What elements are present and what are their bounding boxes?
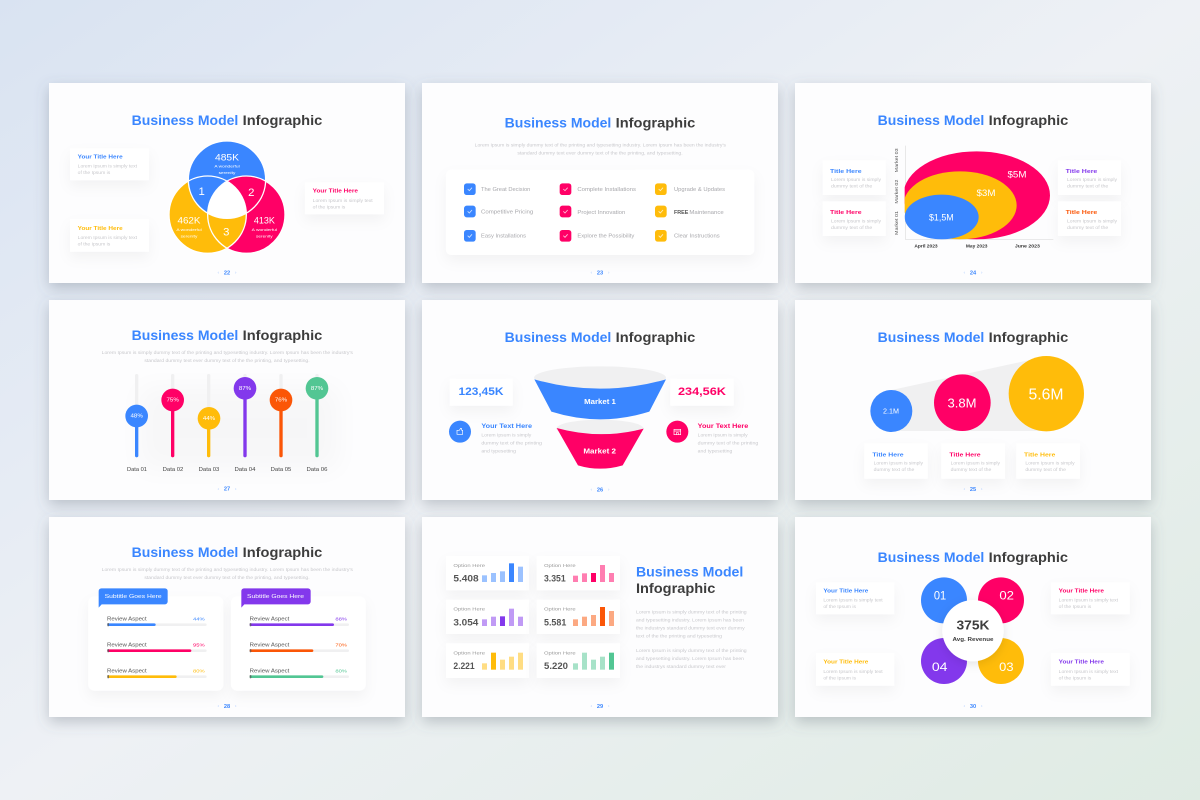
ellipse chart: Market 01	[894, 210, 899, 235]
venn diagram: serenity	[219, 170, 235, 175]
callout: pink	[305, 182, 384, 214]
intro text	[102, 567, 353, 580]
slider chart: 48%	[130, 414, 143, 420]
review card: left: Subtitle Goes Here	[105, 594, 162, 600]
callout: blue: of the Ipsum is	[78, 170, 110, 175]
venn diagram: 462K	[177, 215, 201, 225]
intro text: standard dummy text ever dummy text of the the printing, and typesetting.	[517, 150, 683, 155]
callout: purple: Title Here	[1066, 169, 1097, 175]
text block: text of the the printing and typesetting	[636, 633, 723, 638]
page number: ‹	[590, 704, 592, 710]
ellipse chart: May 2023	[966, 243, 988, 248]
page number: 27	[224, 487, 230, 493]
check labels: Project Innovation	[577, 210, 625, 216]
card: 3.351	[537, 556, 620, 590]
petal diagram	[921, 577, 1024, 684]
value card: right: 234,56K	[678, 386, 727, 398]
callout: purple: Lorem Ipsum is simply	[1067, 177, 1118, 182]
page number: ›	[608, 487, 610, 493]
review card: right: Review Aspect	[250, 669, 290, 675]
check labels: Clear Instructions	[674, 234, 720, 240]
card: 5.220: 5.220	[544, 661, 568, 671]
callout: blue: Lorem Ipsum is simply text	[823, 598, 884, 603]
venn diagram: 1	[199, 186, 205, 198]
review card: right: 80%	[335, 669, 348, 675]
page number: ‹	[590, 270, 592, 276]
review card: left: 95%	[193, 643, 205, 649]
panel: review bars slide 28	[49, 517, 405, 717]
page number: ›	[608, 270, 610, 276]
petal diagram: 375K	[956, 617, 990, 632]
slider chart: 87%	[311, 386, 323, 392]
panel: venn diagram slide 22	[49, 83, 405, 283]
review card: left: 80%	[193, 669, 205, 675]
heading: Infographic	[636, 580, 716, 596]
page number: ‹	[590, 487, 592, 493]
page number: ‹	[217, 486, 219, 492]
callout: orange: dummy text of the	[1067, 225, 1109, 230]
heading	[878, 112, 1069, 128]
panel: option cards slide 29	[422, 517, 778, 717]
panel: four petals slide 30	[795, 517, 1151, 717]
text block: left	[481, 424, 543, 453]
heading	[505, 329, 696, 345]
callout: yellow: Lorem Ipsum is simply text	[823, 669, 884, 674]
ellipse chart: June 2023	[1015, 243, 1041, 248]
review card: right: Subtitle Goes Here	[247, 594, 304, 600]
review card: left: Review Aspect	[107, 643, 147, 649]
checklist card	[446, 170, 754, 255]
text block: right	[698, 424, 759, 453]
ellipse chart	[894, 146, 1053, 248]
review card: right: 70%	[335, 643, 348, 649]
text block: left: and typesetting	[481, 448, 517, 453]
panel: checklist slide 23	[422, 83, 778, 283]
callout: blue: Your Title Here	[78, 155, 123, 161]
card: 2.221	[446, 643, 529, 678]
page number	[963, 270, 983, 276]
page number: 26	[597, 487, 603, 493]
panel: funnel slide 26	[422, 300, 778, 500]
ellipse chart: $1,5M	[929, 212, 954, 222]
text block: right: dummy text of the printing	[698, 440, 759, 445]
callout: pink: of the Ipsum is	[1059, 604, 1091, 609]
card: 5.408: 5.408	[453, 573, 479, 583]
callout: yellow	[70, 219, 149, 252]
heading: Infographic	[243, 327, 323, 343]
value card: left: 123,45K	[458, 386, 504, 398]
check marks	[468, 188, 663, 237]
heading	[132, 544, 323, 560]
heading: Infographic	[243, 544, 323, 560]
page number: 24	[970, 270, 977, 276]
heading	[636, 564, 743, 596]
callout: pink: Your Title Here	[313, 189, 358, 195]
slider chart: Data 06	[306, 467, 328, 473]
slider chart: 87%	[239, 386, 251, 392]
icon: pink circle	[666, 421, 688, 443]
venn diagram: 3	[223, 227, 229, 239]
callout: pink: Your Title Here	[1059, 588, 1104, 594]
text block: Lorem Ipsum is simply dummy text of the printing	[636, 609, 747, 614]
callout: orange	[1058, 201, 1121, 236]
text block	[636, 609, 747, 669]
check items: column 3	[655, 183, 667, 242]
card: 3.351: Option Here	[544, 563, 576, 569]
check labels	[481, 187, 725, 240]
heading: Business Model	[132, 112, 238, 128]
page number: ›	[235, 704, 237, 710]
card: 5.408	[446, 556, 529, 590]
callout: yellow: Lorem Ipsum is simply text	[78, 235, 138, 240]
slider chart: Data 05	[271, 467, 291, 473]
intro text: standard dummy text ever dummy text of the the printing, and typesetting.	[144, 575, 310, 580]
callout: purple	[1051, 653, 1130, 686]
slider chart: 75%	[166, 398, 179, 404]
slider chart: Data 02	[163, 467, 183, 473]
heading: Business Model	[878, 112, 984, 128]
callout: purple: Your Title Here	[1059, 660, 1104, 666]
card: 2.221: 2.221	[453, 661, 475, 671]
check labels: FREE	[674, 210, 689, 216]
text block: right: and typesetting	[698, 448, 733, 453]
review card: left: Review Aspect	[107, 617, 147, 623]
heading	[878, 329, 1069, 345]
page number: ‹	[963, 487, 965, 493]
intro text: standard dummy text ever dummy text of the the printing, and typesetting.	[144, 358, 310, 363]
card: 5.581	[537, 600, 620, 634]
growth circles	[870, 356, 1084, 432]
page number: 22	[224, 270, 230, 276]
callout: pink	[823, 201, 886, 236]
intro text: Lorem Ipsum is simply dummy text of the printing and typesetting industry. Lorem Ipsum has been the industry's	[102, 567, 353, 572]
callout: yellow	[816, 653, 894, 686]
review card: right: 88%	[335, 617, 348, 623]
card: 3.351: 3.351	[544, 573, 566, 583]
petal diagram: 04	[932, 661, 948, 674]
callout: purple: Lorem Ipsum is simply text	[1059, 669, 1119, 674]
callout: yellow: of the Ipsum is	[823, 675, 856, 680]
check items: column 2	[560, 183, 571, 242]
heading	[132, 112, 323, 128]
page number	[217, 486, 237, 493]
intro text	[102, 350, 353, 363]
card: yellow	[1016, 443, 1080, 479]
card: blue: dummy text of the	[874, 467, 915, 472]
page number: ‹	[963, 704, 965, 710]
card: yellow: Lorem Ipsum is simply	[1025, 460, 1076, 465]
callout: blue	[70, 148, 149, 180]
heading: Business Model	[132, 544, 238, 560]
page number	[590, 487, 610, 493]
callout: pink: Lorem Ipsum is simply text	[1059, 598, 1119, 603]
venn diagram: A wonderful	[214, 164, 240, 169]
slider chart: Data 04	[234, 467, 256, 473]
card: 5.220	[537, 643, 620, 678]
callout: purple: of the Ipsum is	[1059, 675, 1091, 680]
growth circles: 3.8M	[947, 396, 976, 410]
panel: slider chart slide 27	[49, 300, 405, 500]
heading: Infographic	[243, 112, 323, 128]
review card: left	[88, 588, 223, 691]
card: 2.221: Option Here	[453, 650, 485, 656]
page number: 30	[970, 704, 976, 710]
review card: right: Review Aspect	[250, 617, 290, 623]
heading	[505, 114, 696, 130]
check labels: Upgrade & Updates	[674, 187, 725, 193]
review card: left: Review Aspect	[107, 669, 147, 675]
page number: ‹	[217, 704, 219, 710]
ellipse chart: $5M	[1007, 169, 1026, 179]
card: pink: Lorem Ipsum is simply	[951, 460, 1001, 465]
card: yellow: dummy text of the	[1025, 467, 1067, 472]
check labels: Explore the Possibility	[577, 234, 634, 240]
card: blue: Title Here	[872, 453, 904, 459]
ellipse chart: Market 02	[894, 179, 899, 204]
slider chart: Data 03	[199, 467, 219, 473]
ellipse chart: Market 03	[894, 148, 899, 172]
funnel: Market 2	[583, 446, 616, 455]
slider chart: Data 01	[127, 467, 147, 473]
callout: purple: dummy text of the	[1067, 184, 1109, 189]
funnel	[534, 366, 666, 469]
text block: left: Your Text Here	[481, 424, 533, 430]
heading: Business Model	[505, 329, 611, 345]
venn diagram: A wonderful	[252, 227, 277, 232]
ellipse chart: April 2023	[914, 243, 938, 248]
check labels: Competitive Pricing	[481, 209, 533, 215]
card: 3.054: Option Here	[453, 607, 485, 613]
callout: blue	[816, 582, 894, 614]
callout: yellow: of the Ipsum is	[78, 241, 110, 246]
value card: right	[670, 379, 734, 406]
page number	[217, 270, 237, 276]
callout: blue: Title Here	[830, 169, 862, 175]
page number: 29	[597, 704, 603, 710]
page number	[217, 704, 237, 710]
page number: 28	[224, 704, 230, 710]
page number: ›	[235, 270, 237, 276]
card: 3.054: 3.054	[453, 617, 479, 627]
venn diagram	[169, 141, 285, 253]
page number: ›	[981, 704, 983, 710]
slider chart: 44%	[203, 416, 215, 422]
growth circles: 2.1M	[883, 407, 899, 416]
petal diagram: 03	[999, 661, 1013, 674]
page number: 23	[597, 270, 603, 276]
card: yellow: Title Here	[1024, 453, 1055, 459]
petal diagram: Avg. Revenue	[952, 637, 994, 643]
callout: blue: Lorem Ipsum is simply text	[78, 164, 138, 169]
heading	[132, 327, 323, 343]
slider chart: 76%	[275, 398, 287, 404]
heading: Business Model	[636, 564, 743, 580]
check labels: Easy Installations	[481, 234, 526, 240]
callout: orange: Lorem Ipsum is simply	[1067, 218, 1118, 223]
card: pink: Title Here	[949, 453, 981, 459]
venn diagram: 485K	[215, 152, 239, 162]
value card: left	[450, 379, 513, 406]
page number: ›	[235, 486, 237, 492]
growth circles: 5.6M	[1028, 387, 1063, 404]
callout: orange: Title Here	[1066, 210, 1097, 216]
card: 5.581: 5.581	[544, 617, 566, 627]
page number: ‹	[217, 270, 219, 276]
slider chart	[125, 374, 339, 473]
intro text	[475, 142, 726, 155]
venn diagram: 2	[248, 187, 254, 199]
intro text: Lorem Ipsum is simply dummy text of the printing and typesetting industry. Lorem Ipsum has been the industry's	[102, 350, 353, 355]
callout: blue	[823, 160, 886, 195]
heading: Business Model	[505, 114, 611, 130]
card: pink	[941, 443, 1005, 479]
callout: pink: Title Here	[830, 210, 862, 216]
heading: Business Model	[132, 327, 238, 343]
page number	[963, 704, 983, 710]
callout: blue: dummy text of the	[831, 184, 873, 189]
review card: left: 44%	[193, 617, 205, 623]
check labels: Complete Installations	[577, 187, 636, 193]
panel: growing circles slide 25	[795, 300, 1151, 500]
panel: nested ellipse chart slide 24	[795, 83, 1151, 283]
text block: Lorem Ipsum is simply dummy text of the printing	[636, 648, 747, 653]
check labels: The Great Decision	[481, 187, 530, 193]
text block: left: dummy text of the printing	[481, 440, 543, 445]
heading: Business Model	[878, 549, 984, 565]
text block: and typesetting industry. Lorem Ipsum has been	[636, 617, 745, 622]
text block: left: Lorem Ipsum is simply	[481, 433, 532, 438]
card: 3.054	[446, 600, 529, 634]
card: pink: dummy text of the	[951, 467, 992, 472]
card: blue: Lorem Ipsum is simply	[874, 460, 924, 465]
text block: right: Lorem Ipsum is simply	[698, 433, 749, 438]
callout: blue: of the Ipsum is	[823, 604, 856, 609]
heading	[878, 549, 1068, 565]
card: 5.408: Option Here	[453, 563, 485, 569]
heading: Infographic	[989, 549, 1068, 565]
check labels: Maintenance	[689, 210, 724, 216]
callout: blue: Lorem Ipsum is simply	[831, 177, 882, 182]
text block: and typesetting industry. Lorem Ipsum has been	[636, 656, 745, 661]
venn diagram: 413K	[254, 215, 275, 225]
intro text: Lorem Ipsum is simply dummy text of the printing and typesetting industry. Lorem Ipsum has been the industry's	[475, 142, 726, 147]
page number: ›	[981, 487, 983, 493]
page number	[590, 270, 610, 276]
text block: the industrys standard dummy text ever	[636, 664, 727, 669]
heading: Infographic	[616, 329, 696, 345]
heading: Business Model	[878, 329, 984, 345]
text block: right: Your Text Here	[698, 424, 749, 430]
page number: ›	[981, 270, 983, 276]
heading: Infographic	[616, 114, 696, 130]
review card: right: Review Aspect	[250, 643, 290, 649]
funnel: Market 1	[584, 397, 616, 406]
callout: pink	[1051, 582, 1130, 614]
ellipse chart: $3M	[976, 188, 995, 198]
callout: yellow: Your Title Here	[823, 660, 868, 666]
card: 5.220: Option Here	[544, 650, 576, 656]
venn diagram: serenity	[256, 233, 273, 238]
card: 5.581: Option Here	[544, 607, 576, 613]
callout: pink: Lorem Ipsum is simply	[831, 218, 882, 223]
venn diagram: serenity	[181, 233, 197, 238]
heading: Infographic	[989, 112, 1069, 128]
callout: pink: Lorem Ipsum is simply text	[313, 198, 374, 203]
page number: ›	[608, 704, 610, 710]
page number: 25	[970, 487, 976, 493]
icon: blue circle	[449, 421, 471, 443]
page number	[590, 704, 610, 710]
petal diagram: 01	[934, 589, 946, 602]
page number	[963, 487, 983, 493]
callout: blue: Your Title Here	[823, 588, 868, 594]
callout: purple	[1058, 160, 1121, 195]
card: blue	[864, 443, 928, 479]
callout: yellow: Your Title Here	[78, 226, 123, 232]
check items: column 1	[464, 183, 476, 242]
heading: Infographic	[989, 329, 1069, 345]
text block: the industrys standard dummy text ever dummy	[636, 625, 746, 630]
callout: pink: dummy text of the	[831, 225, 873, 230]
callout: pink: of the Ipsum is	[313, 204, 345, 209]
page number: ‹	[963, 270, 965, 276]
petal diagram: 02	[999, 589, 1014, 602]
review card: right	[231, 588, 366, 691]
venn diagram: A wonderful	[176, 227, 202, 232]
